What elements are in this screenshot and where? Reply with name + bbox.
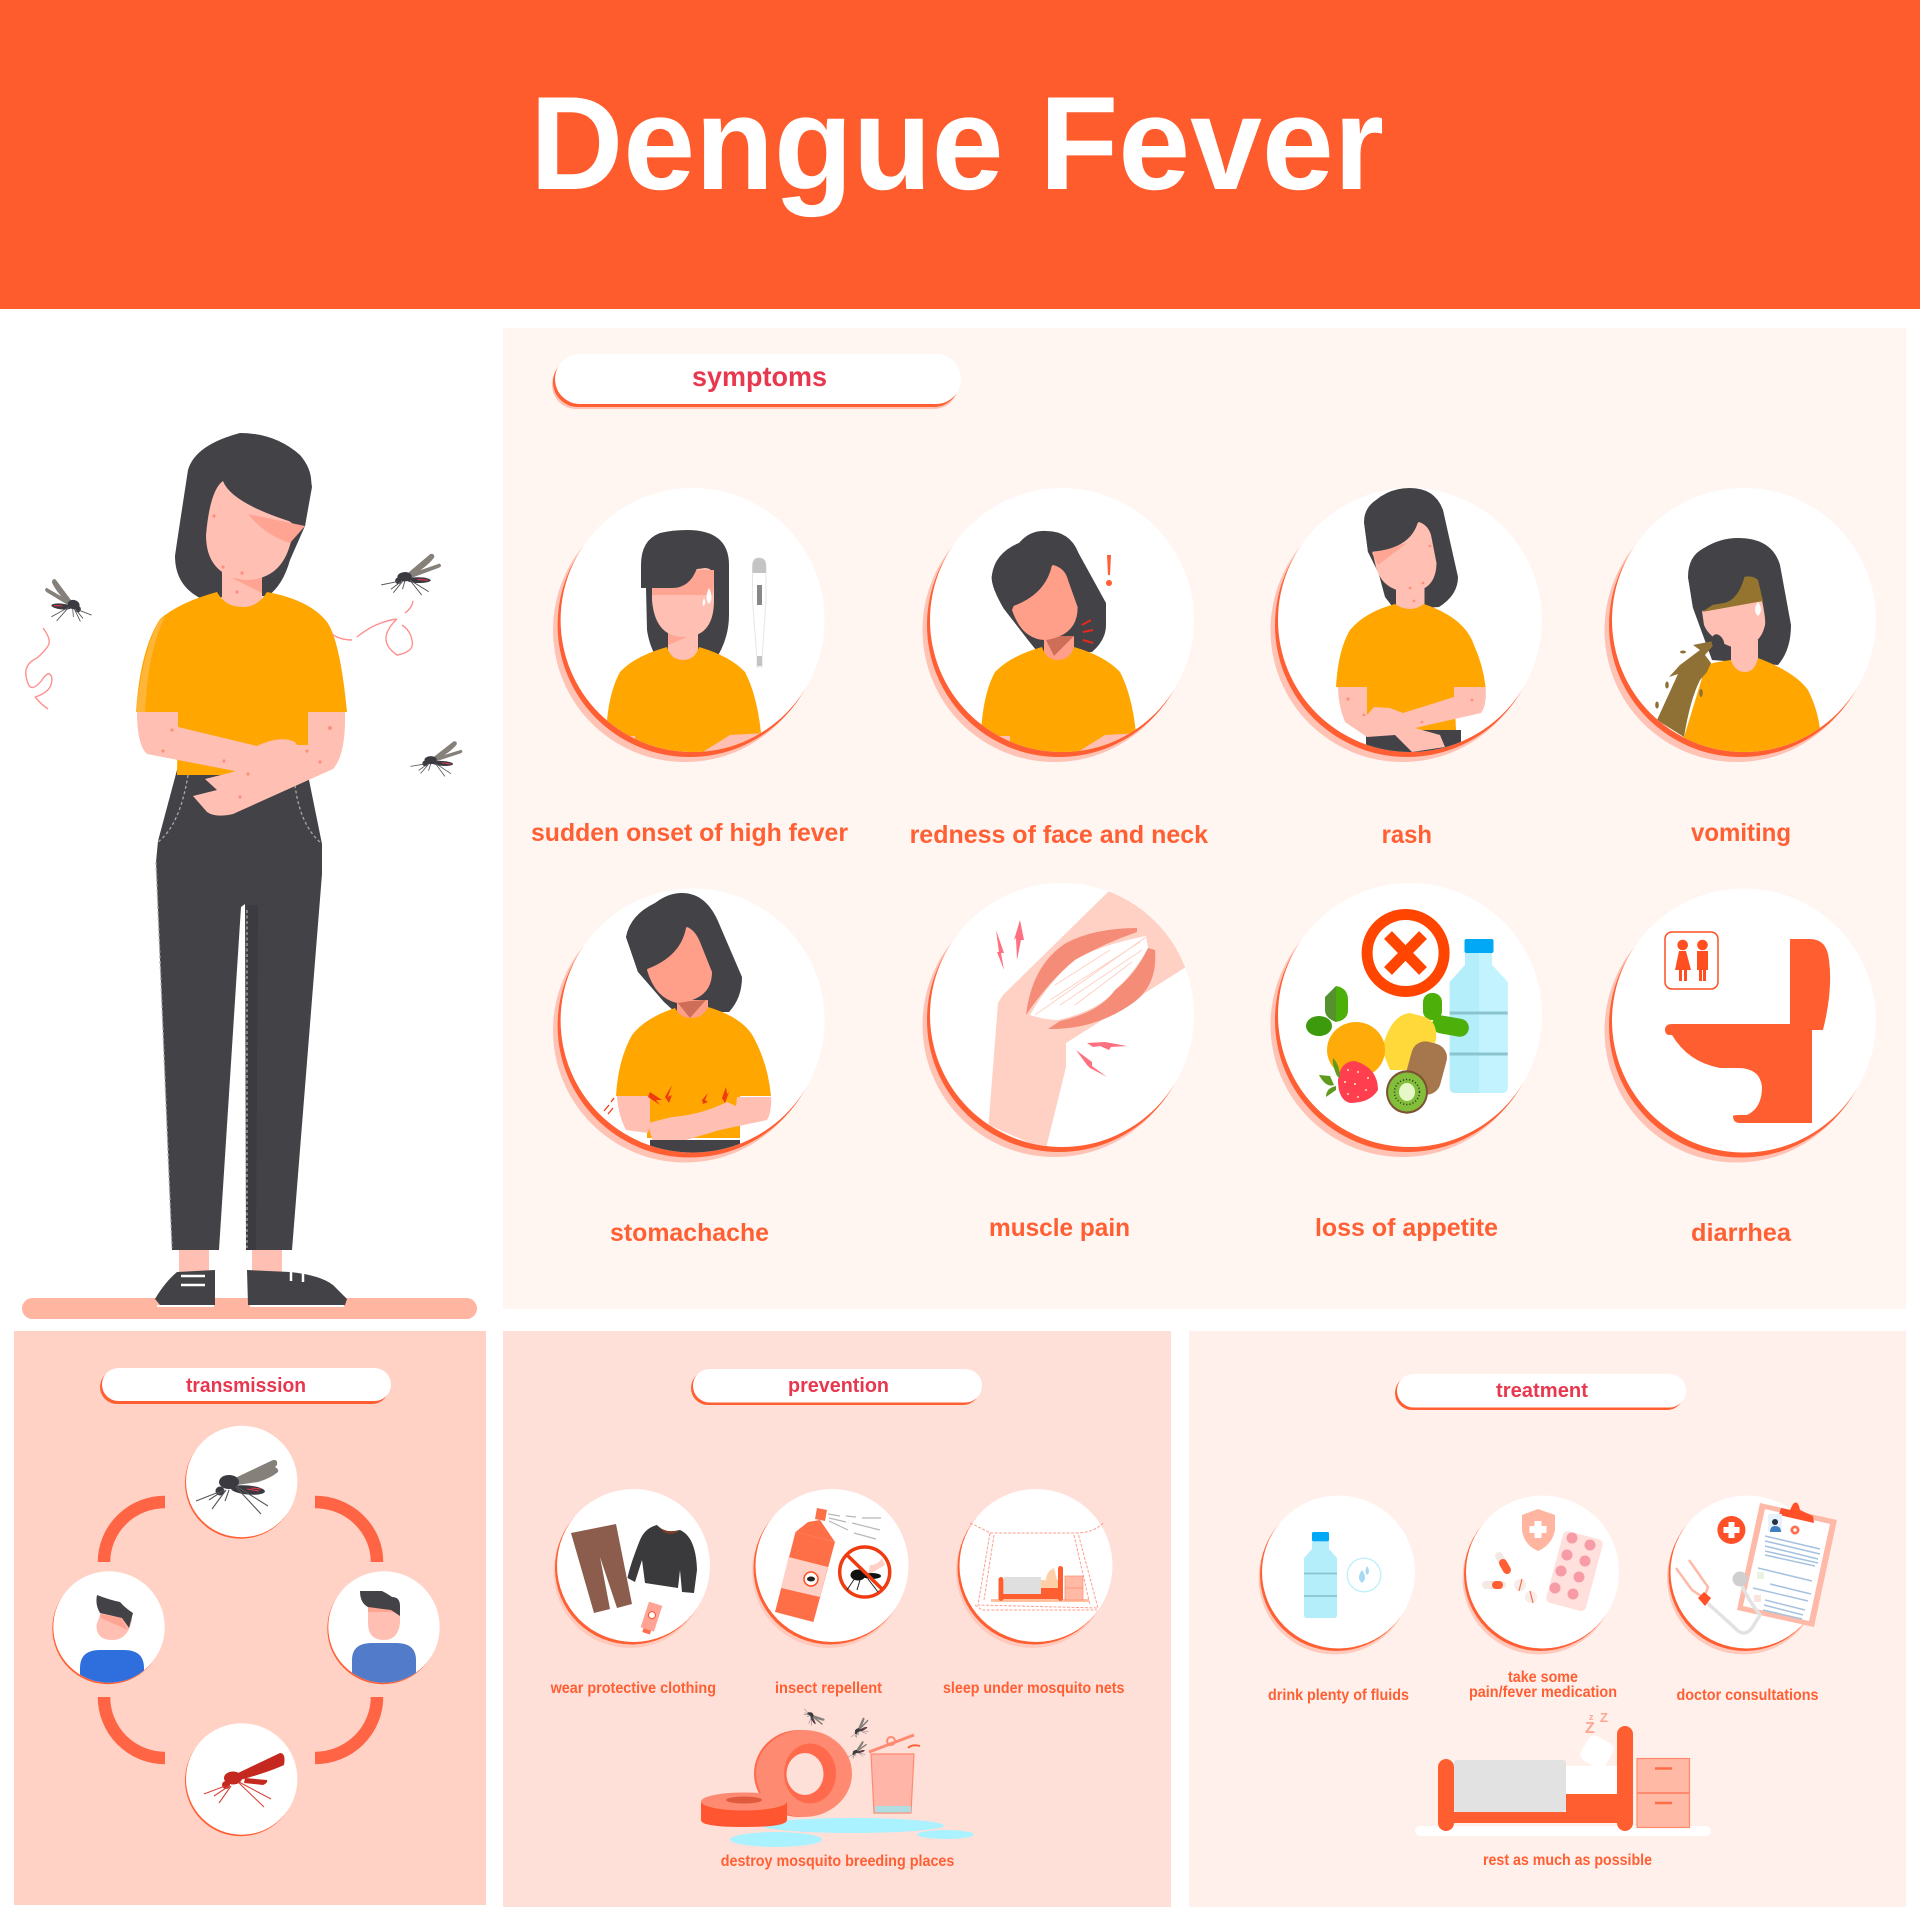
- prevention: mosquito nets: [943, 1489, 1124, 1697]
- shoes: [155, 1270, 215, 1305]
- label: insect repellent: [775, 1680, 882, 1697]
- circle badge: [752, 1489, 908, 1648]
- floor: [1415, 1826, 1711, 1836]
- treatment: medication: [1462, 1496, 1619, 1701]
- repellent cream: [639, 1602, 662, 1635]
- symptom: muscle pain: [922, 883, 1194, 1241]
- circle badge: [1667, 1496, 1824, 1654]
- prevention: insect repellent: [752, 1489, 908, 1697]
- stethoscope: [1676, 1560, 1760, 1633]
- small mosquitoes: [800, 1702, 826, 1731]
- sleep z marks: z: [1589, 1712, 1594, 1722]
- bed under net: [991, 1566, 1089, 1602]
- label: loss of appetite: [1315, 1214, 1498, 1242]
- prevention: breeding places illustration: [701, 1702, 974, 1870]
- symptom: vomiting: [1604, 488, 1876, 847]
- label: rash: [1382, 821, 1432, 849]
- cycle arcs: [104, 1502, 377, 1758]
- label: sleep under mosquito nets: [943, 1680, 1124, 1697]
- upright tyre: [754, 1730, 852, 1817]
- circle badge: [922, 883, 1194, 1157]
- shirt: [136, 592, 347, 775]
- woman with rash: [1336, 488, 1486, 770]
- red cross badge: [1717, 1516, 1745, 1544]
- water drops ring: [1347, 1558, 1381, 1592]
- legs: [179, 1245, 282, 1274]
- pill blister: [1545, 1530, 1604, 1612]
- treatment: bed rest illustration: [1415, 1710, 1711, 1869]
- fruits: [1306, 986, 1470, 1114]
- circle badge: [1270, 883, 1542, 1157]
- label: stomachache: [610, 1219, 769, 1247]
- label: diarrhea: [1691, 1219, 1792, 1247]
- mosquito left: [39, 578, 97, 628]
- circle badge: [553, 888, 825, 1162]
- transmission heading pill: transmission: [186, 1375, 306, 1397]
- flight trails: [26, 601, 413, 709]
- water puddles: [730, 1818, 974, 1847]
- shield: [1522, 1509, 1555, 1551]
- symptom: loss of appetite: [1270, 883, 1542, 1242]
- woman with stomachache: [604, 893, 771, 1158]
- symptom: stomachache: [553, 888, 825, 1247]
- panel: treatment: [1189, 1331, 1906, 1907]
- sleep z marks: Z: [1600, 1710, 1608, 1725]
- treatment heading pill: [1395, 1374, 1686, 1410]
- circle badge: [922, 488, 1194, 762]
- symptoms heading pill: symptoms: [692, 361, 827, 392]
- label: destroy mosquito breeding places: [721, 1853, 954, 1870]
- circle badge: [1258, 1496, 1415, 1654]
- loose capsules: [1486, 1556, 1537, 1603]
- panel: transmission: [14, 1331, 486, 1905]
- label: take some: [1508, 1669, 1578, 1686]
- mosquito lower right: [410, 741, 463, 778]
- ground shadow: [22, 1298, 477, 1319]
- mosquito upper right: [379, 553, 443, 598]
- face: [206, 481, 296, 580]
- woman with fever: [607, 530, 761, 752]
- sleep z marks: Z: [1585, 1720, 1595, 1737]
- circle badge: [1604, 488, 1876, 762]
- label: doctor consultations: [1676, 1687, 1818, 1704]
- cycle: infected person left: [52, 1571, 165, 1690]
- main illustration: woman with mosquitoes: [22, 433, 477, 1319]
- header banner: [0, 0, 1920, 309]
- prevention heading pill: [691, 1369, 982, 1405]
- symptom: redness of face and neck: [910, 488, 1208, 849]
- trousers: [156, 770, 322, 1250]
- open container: [869, 1735, 920, 1813]
- flat tyre: [701, 1792, 787, 1827]
- circle badge: [553, 488, 825, 762]
- sleep z marks: [1585, 1710, 1608, 1737]
- label: redness of face and neck: [910, 821, 1208, 849]
- label: pain/fever medication: [1469, 1684, 1617, 1701]
- prevention heading pill: prevention: [788, 1375, 889, 1397]
- panel: prevention: [503, 1331, 1171, 1907]
- hair: [175, 433, 311, 598]
- label: drink plenty of fluids: [1268, 1687, 1409, 1704]
- thermometer: [752, 558, 766, 667]
- exclamation and pain marks: [1082, 555, 1112, 643]
- treatment heading pill: treatment: [1496, 1380, 1588, 1402]
- toilet: [1665, 939, 1830, 1123]
- prevention: protective clothing: [550, 1489, 716, 1697]
- symptoms heading pill: [552, 354, 961, 409]
- spray mist: [828, 1514, 881, 1539]
- label: rest as much as possible: [1483, 1852, 1652, 1869]
- circle badge: [554, 1489, 710, 1648]
- cycle: healthy mosquito: [185, 1426, 297, 1539]
- water bottle: [1450, 939, 1508, 1093]
- woman with flushed face: [982, 530, 1136, 752]
- symptom: diarrhea: [1604, 888, 1876, 1247]
- bottle: [1304, 1532, 1337, 1618]
- no sign: [1367, 914, 1444, 992]
- label: [1469, 1669, 1617, 1701]
- label: wear protective clothing: [550, 1680, 716, 1697]
- treatment: doctor: [1667, 1496, 1837, 1704]
- pain bolts: [996, 920, 1127, 1077]
- cycle: infected mosquito: [185, 1723, 297, 1836]
- transmission heading pill: [100, 1368, 391, 1404]
- bed: [1438, 1726, 1633, 1831]
- symptom: high fever: [531, 488, 848, 847]
- arms: [193, 712, 345, 816]
- circle badge: [956, 1489, 1112, 1648]
- bedside cabinet: [1637, 1758, 1690, 1828]
- treatment: fluids: [1258, 1496, 1415, 1704]
- sweater: [628, 1525, 697, 1593]
- arm with muscle: [988, 892, 1185, 1146]
- trousers: [571, 1524, 632, 1613]
- circle badge: [1604, 888, 1876, 1162]
- spray can: [775, 1508, 835, 1622]
- title: Dengue Fever: [530, 70, 1384, 218]
- mosquito net: [970, 1523, 1103, 1610]
- no-mosquito sign: [840, 1547, 890, 1597]
- label: sudden onset of high fever: [531, 819, 848, 847]
- cycle: infected person right: [327, 1571, 440, 1690]
- clipboard: [1737, 1502, 1837, 1627]
- label: vomiting: [1691, 819, 1791, 847]
- woman vomiting: [1655, 538, 1820, 752]
- circle badge: [1462, 1496, 1619, 1654]
- circle badge: [1270, 488, 1542, 762]
- label: muscle pain: [989, 1214, 1130, 1242]
- symptom: rash: [1270, 488, 1542, 849]
- panel: symptoms: [503, 328, 1906, 1309]
- neck: [222, 565, 262, 610]
- restroom sign: [1665, 932, 1718, 989]
- rash spots: [161, 514, 332, 799]
